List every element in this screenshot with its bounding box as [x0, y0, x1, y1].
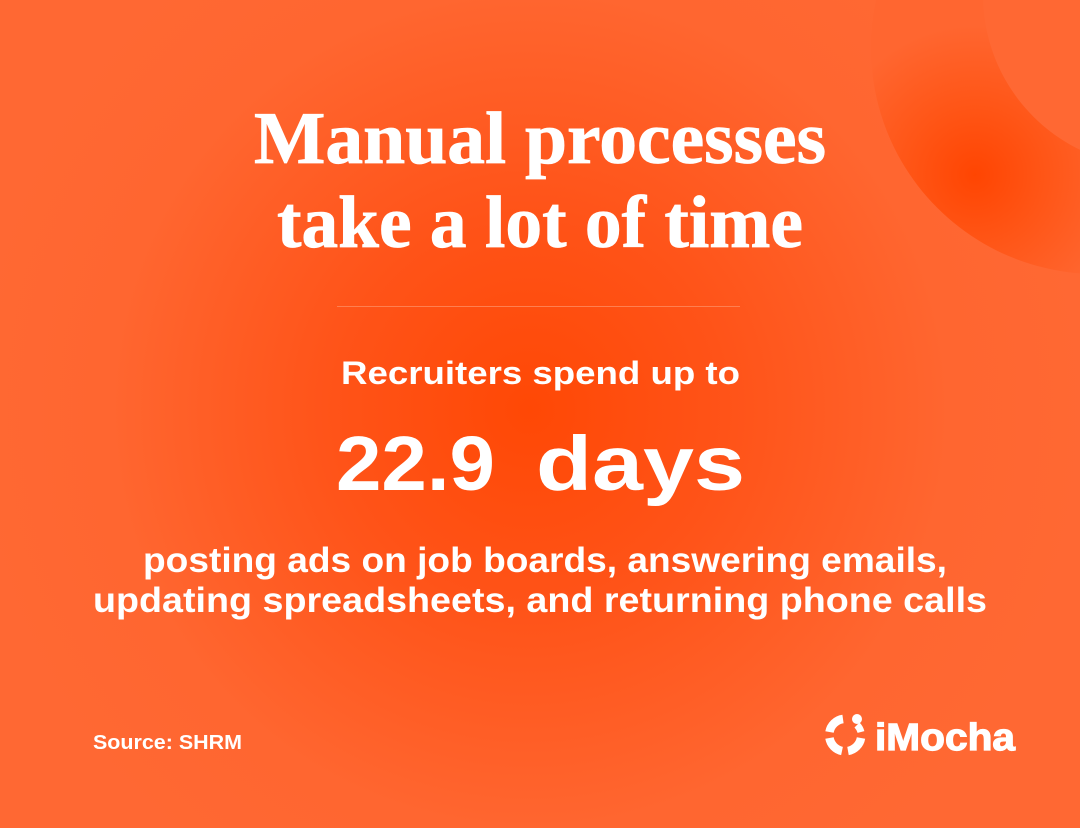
title: Manual processes [254, 98, 826, 180]
title [254, 98, 826, 264]
logo: iMocha [830, 714, 1016, 759]
key statistic: 22.9 [336, 421, 495, 507]
description: posting ads on job boards, answering emails, [143, 541, 947, 580]
key statistic [336, 421, 745, 507]
description [93, 541, 987, 620]
description: updating spreadsheets, and returning phone calls [93, 581, 987, 620]
wordmark: iMocha [875, 717, 1016, 759]
title: take a lot of time [277, 182, 803, 264]
icon: logo ring [830, 714, 862, 751]
lead-in text: Recruiters spend up to [341, 355, 740, 391]
decorative ring glow [871, 0, 1080, 274]
source: Source: SHRM [93, 732, 242, 754]
key statistic: days [536, 421, 745, 507]
